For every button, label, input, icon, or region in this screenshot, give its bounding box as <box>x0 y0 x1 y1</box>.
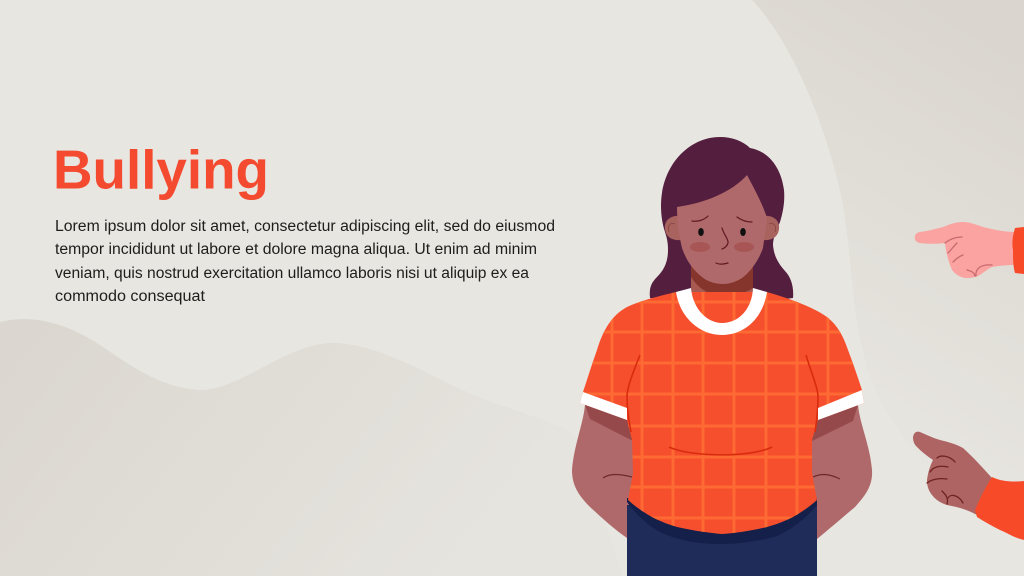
finger lines <box>927 456 963 504</box>
neck shadow <box>691 266 753 295</box>
sleeve <box>975 477 1024 540</box>
pointing hand: top right <box>915 222 1024 278</box>
face <box>677 175 767 284</box>
body text: Lorem ipsum dolor sit amet, consectetur adipiscing elit, sed do eiusmod <box>55 218 555 235</box>
background shape: bottom left wave <box>0 319 622 576</box>
body text <box>55 218 555 305</box>
hand <box>913 432 992 515</box>
body text: tempor incididunt ut labore et dolore magna aliqua. Ut enim ad minim <box>55 241 537 258</box>
background shape: top right <box>752 0 1024 576</box>
elbow creases <box>603 474 840 479</box>
pointing hand: bottom right <box>913 432 1024 540</box>
neck <box>691 265 753 323</box>
ears <box>665 216 779 240</box>
left sleeve cuff <box>580 392 627 420</box>
hair <box>650 137 793 305</box>
finger lines <box>945 237 992 276</box>
shirt <box>580 292 864 534</box>
body text: commodo consequat <box>55 288 206 305</box>
hand <box>915 222 1016 278</box>
right sleeve cuff <box>818 390 864 420</box>
body text: veniam, quis nostrud exercitation ullamco laboris nisi ut aliquip ex ea <box>55 265 529 282</box>
eyes <box>698 228 704 236</box>
arm shadows <box>585 405 858 441</box>
title: Bullying <box>53 138 269 200</box>
left arm <box>572 405 640 538</box>
shirt plaid <box>570 290 870 535</box>
shirt fold lines <box>627 355 818 455</box>
character: sad person <box>570 137 872 576</box>
pants waist shadow <box>627 498 817 544</box>
facial lines: brows, nose, mouth <box>692 216 752 264</box>
pants <box>627 505 817 576</box>
collar <box>676 288 767 335</box>
cuff <box>1012 227 1024 274</box>
cheeks <box>690 242 710 252</box>
right arm <box>805 405 872 539</box>
